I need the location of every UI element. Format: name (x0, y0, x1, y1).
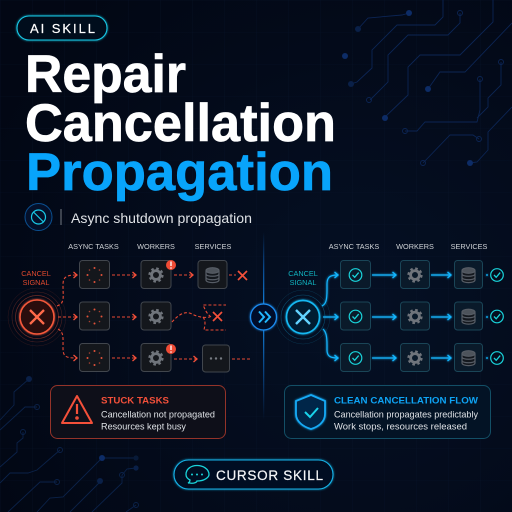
circuit traces: top right (342, 0, 512, 166)
transition chevrons (250, 304, 276, 330)
icon: shield check (296, 395, 325, 429)
column headers left: ASYNC TASKS (68, 242, 119, 251)
title: Cancellation (25, 94, 336, 153)
subtitle with icon: Async shutdown propagation (71, 210, 252, 226)
cancel signal label left: CANCEL (21, 269, 51, 278)
badge: cursor skill: CURSOR SKILL (216, 468, 323, 483)
subtitle with icon (25, 204, 252, 230)
red X marks (213, 271, 247, 321)
cancel signal label right: SIGNAL (290, 278, 316, 287)
cancel icon right (276, 290, 330, 344)
callout: stuck tasks: Cancellation not propagated (101, 410, 215, 420)
badge: AI SKILL (17, 16, 107, 40)
task and worker boxes left (80, 260, 230, 372)
callout: stuck tasks: Resources kept busy (101, 422, 186, 432)
blue arrows (322, 275, 488, 358)
panel: stuck flow (8, 242, 252, 372)
callout: clean flow: Cancellation propagates predictably (334, 410, 478, 420)
column headers right: WORKERS (396, 242, 434, 251)
vertical divider (263, 232, 264, 420)
cancel signal label left: SIGNAL (23, 278, 49, 287)
databases right (462, 268, 475, 283)
column headers right: SERVICES (451, 242, 488, 251)
pending dots (210, 357, 222, 360)
cancel signal label right (288, 269, 318, 287)
callout: stuck tasks: STUCK TASKS (101, 396, 169, 406)
gears right (408, 268, 422, 282)
column headers left (68, 242, 232, 251)
title: Propagation (26, 143, 333, 202)
cancel icon left (8, 288, 66, 346)
callout: stuck tasks (50, 386, 226, 438)
panel: clean flow (276, 242, 503, 372)
title (25, 45, 336, 202)
red dashed arrows (57, 275, 252, 359)
check marks at service ends (491, 269, 503, 281)
badge: AI SKILL: AI SKILL (30, 21, 95, 36)
cancel signal label left (21, 269, 51, 287)
callout: clean flow: CLEAN CANCELLATION FLOW (334, 396, 478, 406)
icon: chat bubble (186, 466, 209, 483)
icon: warning triangle (62, 396, 92, 423)
column headers right: ASYNC TASKS (329, 242, 379, 251)
spinners, gears, databases left (86, 267, 102, 283)
column headers left: SERVICES (195, 242, 232, 251)
callout: clean flow: Work stops, resources released (334, 422, 467, 432)
check marks in task column (349, 269, 362, 281)
badge: cursor skill (174, 460, 333, 489)
title: Repair (25, 45, 186, 104)
callout: clean flow (284, 386, 490, 438)
column headers right (329, 242, 488, 251)
column headers left: WORKERS (137, 242, 175, 251)
circuit traces: bottom left (0, 376, 139, 512)
cancel signal label right: CANCEL (288, 269, 318, 278)
task and worker boxes right (340, 260, 482, 372)
alert badges (166, 260, 176, 354)
